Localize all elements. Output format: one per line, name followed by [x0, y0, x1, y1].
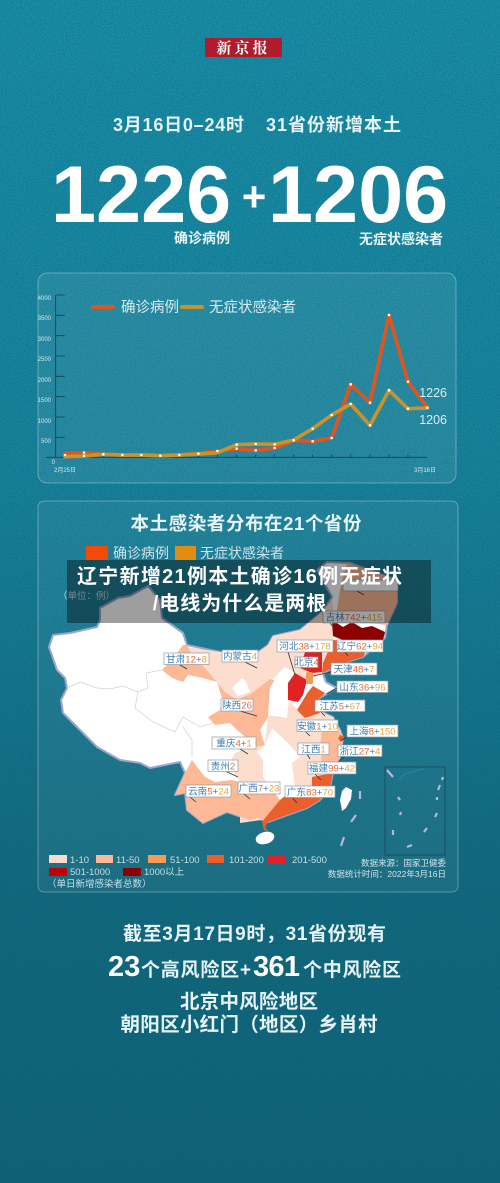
label: 江西: [298, 743, 329, 759]
label: 江苏: 江苏5+67: [320, 700, 360, 712]
end values: [419, 386, 447, 427]
map colour legend: 201-500: [292, 855, 327, 866]
label: 福建: 福建99+42: [309, 762, 355, 774]
label: 浙江: [338, 745, 382, 762]
risk counts: 23: [108, 951, 140, 983]
map: provinces: [49, 562, 445, 855]
subtitle: date and scope: 3月16日0–24时: [113, 115, 244, 135]
label: 吉林: 吉林742+415: [326, 612, 382, 624]
label: 上海: [340, 725, 398, 741]
label: 甘肃: 甘肃12+8: [166, 654, 207, 666]
label: 江苏: [315, 700, 365, 716]
map colour legend: [47, 855, 327, 890]
label: 云南: [186, 785, 231, 802]
province labels: [164, 580, 398, 803]
axis labels: 3000: [38, 337, 52, 343]
risk summary: 截至3月17日9时，31省份现有: [123, 923, 386, 945]
data source: 数据来源：国家卫健委: [361, 858, 446, 868]
region: Jilin dark red: [332, 620, 385, 643]
headline numbers: 1206: [268, 150, 448, 240]
logo: 新京报: 新京报: [216, 39, 271, 57]
label: 广西: [238, 782, 280, 799]
axis labels: 4000: [38, 296, 52, 302]
region: Ningxia white patch: [232, 678, 250, 696]
map colour legend: 11-50: [116, 855, 140, 866]
risk summary: 朝阳区小红门（地区）乡肖村: [120, 1013, 378, 1036]
label: 广东: 广东83+70: [287, 786, 333, 798]
label: 上海: 上海8+150: [349, 726, 396, 738]
logo: 新京报: [205, 38, 282, 57]
map colour legend: 1-10: [70, 855, 89, 866]
label: Heilongjiang box: [343, 580, 398, 595]
label: 重庆: [212, 737, 256, 754]
region: Shanxi white patch: [268, 667, 290, 718]
label: 陕西: [221, 699, 257, 716]
label: 福建: [308, 762, 356, 780]
axis labels: 2500: [38, 357, 52, 363]
risk summary: 北京中风险地区: [180, 990, 318, 1013]
headline numbers: +: [242, 173, 266, 220]
map colour legend: （单日新增感染者总数）: [47, 878, 152, 890]
map key: [86, 545, 284, 561]
islands: [254, 787, 352, 846]
risk counts: 361: [253, 951, 300, 983]
unit note: （单位：例）: [58, 590, 115, 602]
axis labels: 2月25日: [54, 467, 76, 474]
axis labels: 1500: [38, 398, 52, 404]
headline numbers: 1226: [51, 150, 231, 240]
panel: map: [38, 501, 458, 892]
risk counts: 个中风险区: [303, 958, 401, 981]
label: 内蒙古: 内蒙古4: [223, 650, 258, 662]
label: 辽宁: 辽宁62+94: [337, 640, 384, 652]
axis labels: 2000: [38, 378, 52, 384]
map heading: 本土感染者分布在21个省份: [130, 513, 362, 534]
axis labels: 0: [52, 460, 56, 466]
region: orange provinces: [262, 640, 370, 831]
data source: [328, 858, 446, 879]
internal borders: [67, 670, 213, 757]
risk counts: [108, 951, 401, 983]
label: 安徽: 安徽1+10: [297, 720, 338, 732]
label: 贵州: 贵州2: [211, 760, 235, 772]
label: 山东: 山东36+96: [339, 682, 386, 694]
chart lines: [65, 315, 427, 457]
headline numbers: [51, 150, 448, 247]
risk summary: [108, 923, 401, 1036]
label: 贵州: [208, 760, 238, 777]
label: 北京: 北京4: [294, 656, 319, 668]
map key: 无症状感染者: [200, 545, 284, 561]
label: 重庆: 重庆4+1: [216, 738, 252, 750]
label: 陕西: 陕西26: [222, 700, 252, 712]
label: 甘肃: [164, 653, 209, 669]
headline numbers: 确诊病例: [174, 230, 230, 246]
overlay headline band: 辽宁新增21例本土确诊16例无症状: [77, 564, 402, 588]
map colour legend: 101-200: [229, 855, 264, 866]
overlay headline band: [67, 560, 431, 623]
chart axes: [46, 295, 427, 457]
end values: 1226: [419, 386, 447, 400]
overlay headline band: /电线为什么是两根: [153, 592, 327, 615]
label: 河北: [277, 640, 333, 675]
map colour legend: 51-100: [170, 855, 200, 866]
chart legend: 确诊病例: [121, 299, 179, 316]
label: 广西: 广西7+23: [239, 782, 279, 794]
label: 吉林: [323, 611, 385, 627]
label: 天津: 天津48+7: [334, 664, 374, 676]
label: 浙江: 浙江27+4: [340, 746, 381, 758]
end values: 1206: [419, 413, 447, 427]
data source: 数据统计时间：2022年3月16日: [328, 869, 446, 879]
region: light provinces: [187, 600, 343, 823]
region: Tianjin: [306, 672, 313, 684]
label: 云南: 云南5+24: [188, 786, 230, 798]
label: 安徽: [297, 720, 338, 736]
region: peach provinces (Gansu, Shaanxi, Yunnan, Guangxi, Anhui, Zhejiang): [162, 563, 397, 823]
label: 山东: [327, 681, 388, 694]
axis labels: 3月16日: [414, 467, 436, 474]
map: China outline: [49, 562, 397, 823]
axis labels: 3500: [38, 316, 52, 322]
subtitle: date and scope: [113, 114, 401, 135]
label: 辽宁: [337, 640, 384, 656]
chart legend: 无症状感染者: [209, 299, 296, 316]
region: Henan and Hebei red: [288, 652, 322, 702]
risk counts: 个高风险区+: [141, 958, 251, 981]
headline numbers: 无症状感染者: [359, 231, 443, 247]
axis labels: 500: [41, 439, 52, 445]
axis labels: 1000: [38, 419, 52, 425]
map colour legend: 501-1000: [70, 867, 110, 878]
chart legend: [93, 299, 296, 316]
label: 江西: 江西1: [301, 744, 326, 756]
subtitle: date and scope: 31省份新增本土: [266, 114, 401, 135]
axis labels: [38, 296, 436, 474]
region: Hubei and Hunan white patch: [257, 728, 300, 800]
label: 河北: 河北38+178: [279, 640, 331, 652]
label: 内蒙古: [222, 650, 258, 668]
label: 广东: [285, 786, 335, 803]
panel: trend line chart: [38, 273, 456, 483]
map key: 确诊病例: [113, 545, 169, 561]
South China Sea inset: [341, 767, 445, 855]
map colour legend: 1000以上: [144, 867, 185, 878]
label: 天津: [313, 663, 377, 676]
